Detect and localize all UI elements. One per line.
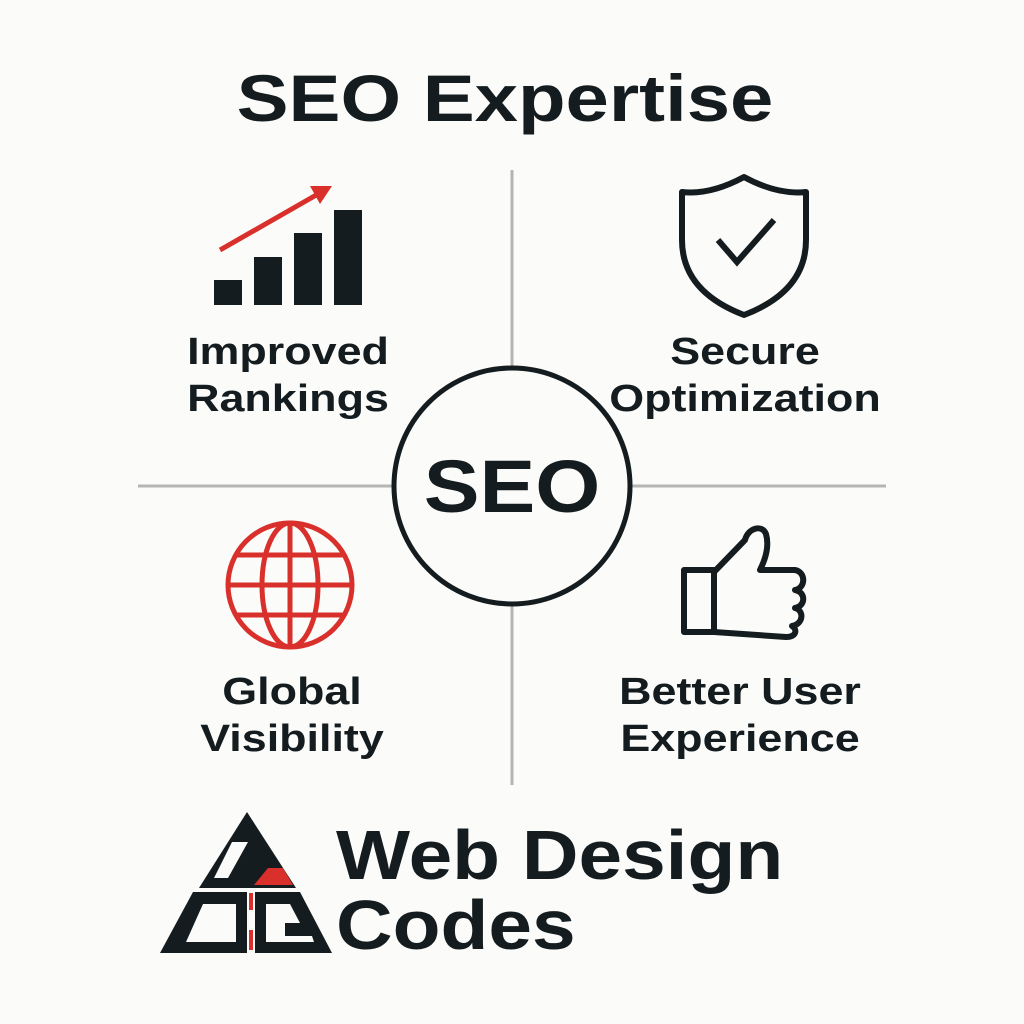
- label: Improved Rankings: Improved: [187, 331, 389, 373]
- label: Better User Experience: Experience: [620, 718, 860, 760]
- label: Secure Optimization: Optimization: [609, 378, 881, 420]
- logo mark: [160, 812, 332, 953]
- label: Global Visibility: [200, 671, 384, 760]
- label: Secure Optimization: [609, 331, 881, 420]
- icon: bar chart with arrow: [214, 186, 362, 305]
- title: SEO Expertise: [237, 61, 773, 135]
- icon: thumbs up: [681, 525, 806, 640]
- logo text: [336, 816, 783, 964]
- label: Secure Optimization: Secure: [670, 331, 820, 373]
- icon: globe: [226, 520, 354, 650]
- label: Better User Experience: [619, 671, 861, 760]
- label: Improved Rankings: [187, 331, 389, 420]
- label: Improved Rankings: Rankings: [187, 378, 389, 420]
- icon: shield: [679, 174, 809, 318]
- logo text: Codes: [336, 886, 576, 964]
- label: Global Visibility: Global: [222, 671, 362, 713]
- label: Global Visibility: Visibility: [200, 718, 384, 760]
- logo text: Web Design: [336, 816, 783, 894]
- label: Better User Experience: Better User: [619, 671, 861, 713]
- diagram lines and circle: SEO: [424, 445, 600, 528]
